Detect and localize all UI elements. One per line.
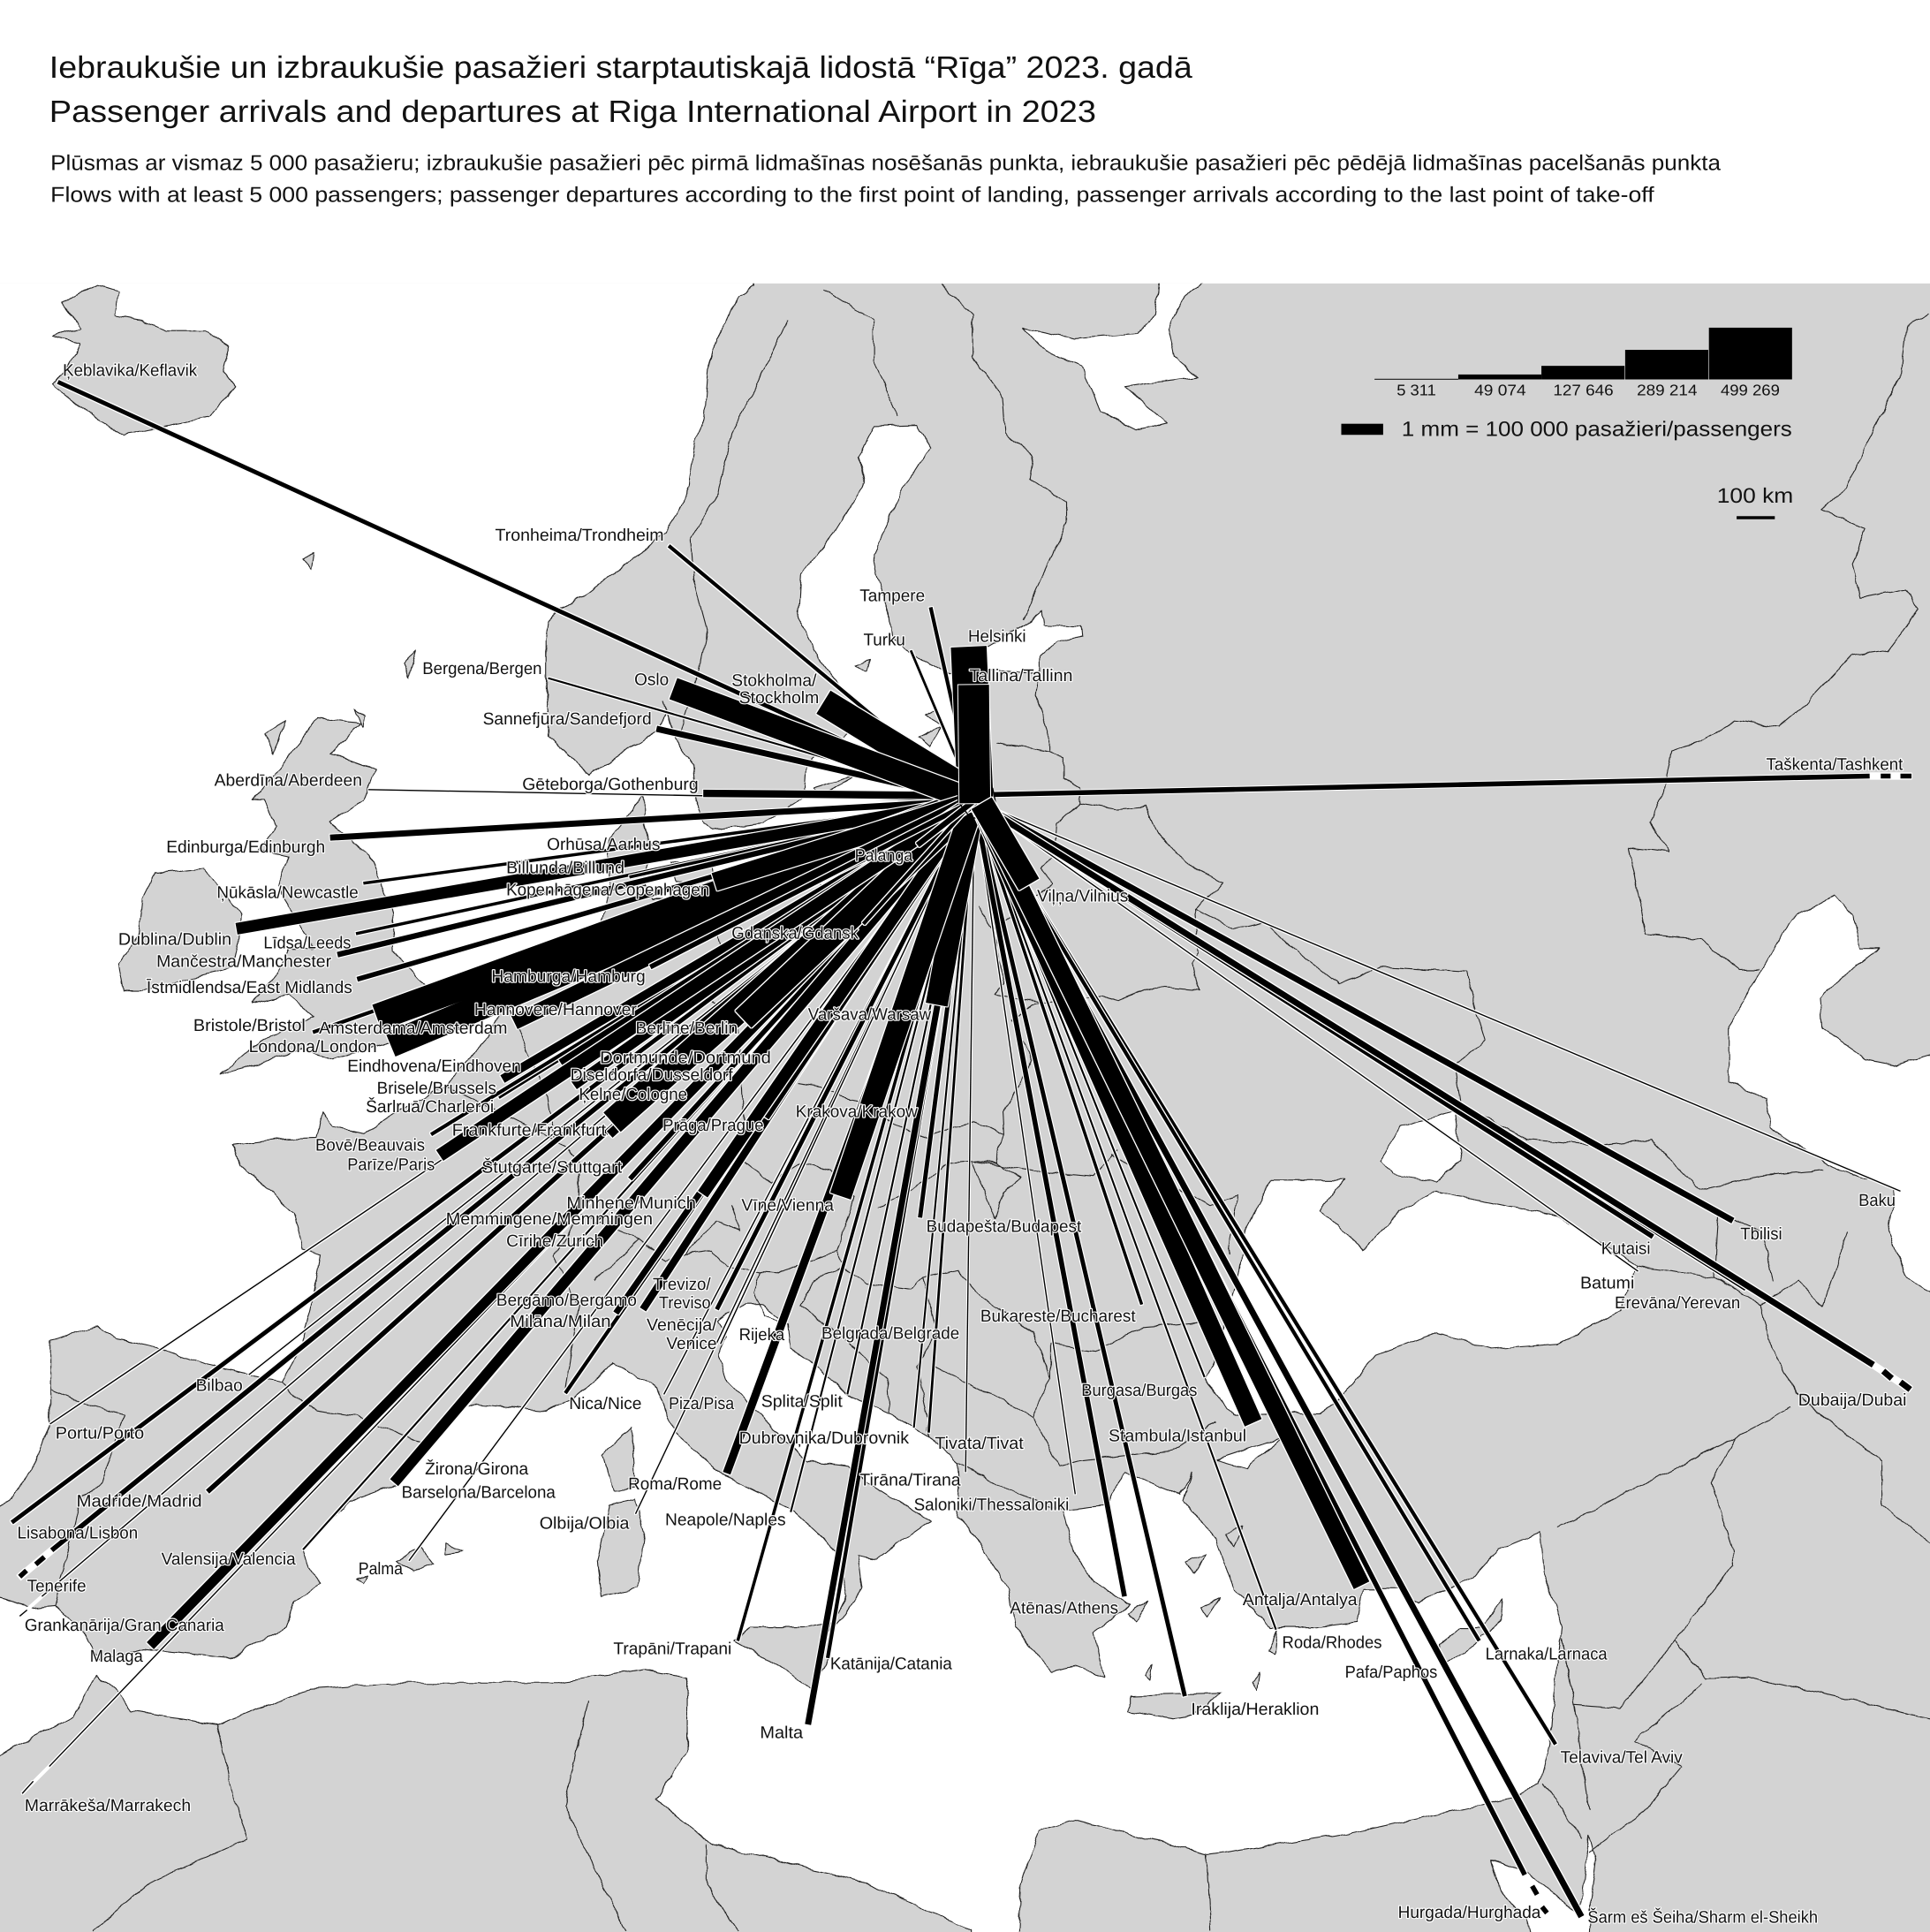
flow: Sandefjord [656,729,974,800]
label: Prague: Prāga/Prague [662,1116,764,1134]
label: Baku: Baku [1858,1191,1896,1209]
flow: Charleroi [431,800,974,1134]
label: Treviso [653,1275,711,1312]
flow: Tashkent [991,776,1911,794]
flow: Palma [409,800,974,1561]
title: Iebraukušie un izbraukušie pasažieri starptautiskajā lidostā “Rīga” 2023. gadā [49,50,1192,85]
flow: Lisbon [11,800,974,1522]
label: Thessaloniki: Saloniki/Thessaloniki [914,1496,1069,1514]
flow: Bergen [549,678,974,800]
label: Gdansk: Gdaņska/Gdansk [731,924,859,943]
flow: Krakow [921,800,974,1102]
flow: Bristol [313,800,974,1033]
flow: Billund [630,800,974,877]
flow: Edinburgh [330,800,974,837]
flow: Rhodes [974,800,1276,1630]
label: Bucharest: Bukareste/Bucharest [980,1307,1136,1325]
label: Paphos: Pafa/Paphos [1345,1663,1437,1681]
label: Tivat: Tivata/Tivat [935,1434,1024,1452]
flow: Bucharest [974,800,1142,1305]
flow: Olbia [636,800,974,1514]
label: Paris: Parīze/Paris [347,1155,435,1174]
scale bar: 100 km [1717,484,1793,508]
flow: Antalya [978,800,1361,1586]
label: Palanga: Palanga [855,846,913,865]
flow: Aberdeen [368,790,974,800]
label: Copenhagen: Kopenhāgena/Copenhagen [506,881,709,899]
flow: Bergamo [643,800,974,1309]
label: Newcastle: Ņūkāsla/Newcastle [216,883,359,902]
label: Beauvais: Bovē/Beauvais [315,1136,425,1155]
label: Memmingen: Memmingene/Memmingen [446,1209,653,1228]
flow: Barcelona [394,800,974,1482]
flow: Brussels [499,800,974,1097]
flow: Hamburg [650,800,974,967]
label: Leeds: Līdsa/Leeds [263,934,352,952]
flow: Sharm el-Sheikh [974,800,1581,1917]
flow: Keflavik [58,382,974,800]
flow: Burgas [974,800,1205,1377]
flow: Turku [911,650,974,800]
flow: Memmingen [611,800,974,1231]
flow: Tel Aviv [974,800,1555,1744]
label: Treviso: Treviso [659,1293,711,1312]
flow: Madrid [208,800,974,1492]
label: Madrid: Madride/Madrid [76,1492,202,1511]
sea of marmara [1215,1437,1283,1468]
legend: flow width histogram: 499 269 [1721,382,1780,399]
label: Marrakech: Marrākeša/Marrakech [25,1796,191,1815]
label: Hurghada: Hurgada/Hurghada [1398,1903,1541,1921]
label: Pisa: Piza/Pisa [669,1394,734,1413]
hub: Riga [958,788,996,818]
label: Hannover: Hannovere/Hannover [474,1000,637,1019]
label: Treviso: Trevizo/ [653,1275,711,1293]
label: Burgas: Burgasa/Burgas [1081,1381,1197,1399]
flow: Marrakech [22,800,974,1793]
label: Budapest: Budapešta/Budapest [927,1217,1081,1236]
label: Trondheim: Tronheima/Trondheim [496,526,664,544]
label: Hamburg: Hamburga/Hamburg [491,967,646,986]
label: Tbilisi: Tbilisi [1740,1224,1782,1243]
flow: Split [847,800,974,1394]
flow: Stuttgart [630,800,974,1178]
label: Aberdeen: Aberdīna/Aberdeen [215,771,362,790]
label: Edinburgh: Edinburga/Edinburgh [166,837,325,856]
label: Bergen: Bergena/Bergen [422,659,542,678]
flow: Kutaisi [974,800,1653,1237]
label: Larnaca: Larnaka/Larnaca [1486,1645,1608,1663]
flow: Tivat [965,800,974,1472]
flow: Larnaca [974,800,1480,1640]
flow: Tampere [931,607,974,800]
flow: Budapest [920,800,974,1217]
flow: Newcastle [363,800,974,883]
flow: Pisa [664,800,974,1394]
flow: Copenhagen [715,800,974,882]
label: Barcelona: Barselona/Barcelona [402,1483,556,1502]
label: Stockholm: Stockholm [739,688,819,707]
flow: Catania [828,800,974,1658]
flow: Dusseldorf [574,800,974,1085]
label: Tashkent: Taškenta/Tashkent [1767,755,1904,774]
white sea [1022,283,1203,431]
label: Bilbao: Bilbao [196,1376,243,1394]
flow: Valencia [303,800,974,1549]
label: Dusseldorf: Diseldorfa/Dusseldorf [571,1065,733,1084]
label: Frankfurt: Frankfurte/Frankfurt [452,1121,606,1140]
label: Rhodes: Roda/Rhodes [1283,1633,1382,1652]
flow: Heraklion [974,800,1184,1696]
label: Sandefjord: Sannefjūra/Sandefjord [483,709,652,728]
flow: Thessaloniki [974,800,1075,1494]
label: Tirana: Tirāna/Tirana [859,1471,961,1489]
flow: Gdansk [863,800,974,924]
legend: flow width histogram [1374,328,1792,399]
label: Krakow: Krakova/Krakow [796,1102,918,1121]
label: Aarhus: Orhūsa/Aarhus [547,835,661,853]
flow: Warsaw [936,800,974,1004]
label: Belgrade: Belgrada/Belgrade [821,1324,960,1343]
label: Split: Splita/Split [761,1392,843,1411]
subtitle: Flows with at least 5 000 passengers; passenger departures according to the first point of landing, passenger arrivals according to the last point of take-off [50,182,1654,207]
label: Olbia: Olbija/Olbia [540,1514,630,1533]
flow: Malaga [150,800,974,1646]
label: Gran Canaria: Grankanārija/Gran Canaria [25,1616,224,1634]
label: Keflavik: Ķeblavika/Keflavik [63,361,197,379]
label: Oslo: Oslo [634,671,670,688]
label: Nice: Nica/Nice [569,1394,642,1413]
label: Eindhoven: Eindhovena/Eindhoven [347,1057,521,1075]
flow: Hannover [514,800,974,1022]
scale bar [1717,484,1793,519]
flow: East Midlands [357,800,974,980]
flow: Paphos [974,800,1442,1661]
label: Milan: Milāna/Milan [510,1312,611,1330]
flow: Frankfurt [609,800,974,1134]
label: Malta: Malta [760,1724,804,1742]
label: Batumi: Batumi [1580,1274,1634,1292]
label: Naples: Neapole/Naples [665,1511,786,1528]
flow: Dubai [974,800,1911,1390]
label: Zurich: Cīrihe/Zurich [506,1231,603,1250]
label: Antalya: Antalja/Antalya [1243,1590,1358,1609]
label: London: Londona/London [249,1037,377,1056]
flow: Gothenburg [703,793,974,796]
flow: Porto [50,800,974,1424]
label: Dublin: Dublina/Dublin [118,930,231,949]
label: Charleroi: Šarlruā/Charleroi [366,1096,494,1116]
label: Amsterdam: Amsterdama/Amsterdam [319,1019,507,1037]
label: Malaga: Malaga [90,1647,143,1665]
flow: Helsinki [969,647,975,800]
subtitle [50,150,1721,207]
label: Tenerife: Tenerife [27,1577,87,1595]
label: Vilnius: Viļņa/Vilnius [1037,887,1128,905]
label: Turku: Turku [863,631,905,649]
flow: Bilbao [249,800,974,1375]
label: Gothenburg: Gēteborga/Gothenburg [522,775,699,793]
label: Warsaw: Varšava/Warsaw [808,1005,931,1024]
label: Brussels: Brisele/Brussels [377,1080,496,1097]
label: Stuttgart: Štutgarte/Stuttgart [481,1156,622,1177]
flow: Cologne [612,800,974,1122]
flow: Prague [764,800,974,1116]
subtitle: Plūsmas ar vismaz 5 000 pasažieru; izbraukušie pasažieri pēc pirmā lidmašīnas nosēšanās punkta, iebraukušie pasažieri pēc pēdējā lidmašīnas pacelšanās punkta [50,150,1721,175]
flow: Zurich [603,800,974,1236]
flow: Naples [791,800,974,1512]
flow: Vienna [841,800,974,1196]
label: Lisbon: Lisabona/Lisbon [18,1524,138,1542]
flow: Treviso [717,800,974,1309]
flow: Yerevan [974,800,1745,1290]
title [49,50,1192,129]
label: Rijeka: Rijeka [739,1325,785,1344]
flow: Leeds [356,800,974,934]
label: Vienna: Vīne/Vienna [741,1196,834,1215]
flow: Batumi [974,800,1639,1271]
label: East Midlands: Īstmidlendsa/East Midlands [147,978,352,996]
legend: flow width histogram: 289 214 [1637,382,1698,399]
flow: Trapani [738,800,974,1640]
flow: Munich [703,800,974,1194]
flow: Istanbul [978,800,1253,1423]
label: Bergamo: Bergāmo/Bergamo [496,1291,637,1309]
flows from Riga [11,382,1911,1917]
label: Heraklion: Iraklija/Heraklion [1191,1700,1319,1718]
legend: flow width histogram: 127 646 [1553,382,1614,399]
label: Rome: Roma/Rome [628,1474,723,1493]
label: Porto: Portu/Porto [56,1424,145,1443]
title: Passenger arrivals and departures at Riga International Airport in 2023 [49,95,1096,129]
flow: Oslo [673,688,974,800]
flow: Athens [974,800,1124,1596]
label: Dubai: Dubaija/Dubai [1798,1390,1907,1409]
legend: flow width histogram: 49 074 [1474,382,1526,399]
flow: Hurghada [974,800,1547,1913]
label: Stockholm [731,671,819,707]
label: Catania: Katānija/Catania [830,1655,952,1673]
label: Tallinn: Tallina/Tallinn [969,666,1073,685]
label: Munich: Minhene/Munich [566,1193,696,1212]
label: Istanbul: Stambula/Istanbul [1109,1427,1246,1445]
flow: Aarhus [662,800,974,843]
label: Billund: Billunda/Billund [506,859,624,877]
flow: Venice [721,800,974,1344]
black sea [1205,1180,1639,1415]
label: Tel Aviv: Telaviva/Tel Aviv [1561,1748,1683,1767]
flow: Dublin [237,800,974,928]
label: Stockholm: Stokholma/ [731,671,817,690]
flow: Dortmund [562,800,974,1064]
flow: Trondheim [669,546,974,800]
flow: Gran Canaria [19,800,974,1616]
label: Bristol: Bristole/Bristol [193,1016,306,1034]
sea of azov [1381,1110,1461,1183]
city labels [18,361,1907,1927]
label: Helsinki: Helsinki [968,627,1026,646]
label: Venice: Venice [666,1334,717,1352]
label: Valencia: Valensija/Valencia [162,1549,296,1568]
label: Dubrovnik: Dubrovņika/Dubrovnik [739,1429,909,1447]
label: Yerevan: Erevāna/Yerevan [1615,1293,1740,1312]
label: Berlin: Berlīne/Berlin [636,1019,738,1037]
caspian sea [1729,896,1930,1312]
flow: Berlin [744,800,974,1019]
label: Girona: Žirona/Girona [425,1458,529,1478]
legend: flow width histogram: 5 311 [1396,382,1436,399]
legend: width key: 1 mm = 100 000 pasažieri/passengers [1402,418,1792,441]
label: Palma: Palma [359,1559,403,1578]
flow: Eindhoven [503,800,974,1080]
flow: Nice [565,800,974,1393]
flow: Dubrovnik [928,800,974,1433]
label: Venice: Venēcija/ [647,1315,717,1334]
flow: Manchester [337,800,974,955]
label: Sharm el-Sheikh: Šarm eš Šeiha/Sharm el-Sheikh [1587,1907,1818,1927]
label: Tampere: Tampere [859,587,926,605]
flow: Vilnius [981,803,1029,884]
label: Venice [647,1315,717,1352]
flow: Girona [418,800,974,1462]
flow: Tallinn [973,685,975,803]
label: Trapani: Trapāni/Trapani [613,1640,731,1658]
flow: Tbilisi [974,800,1733,1221]
islands [53,284,1504,1718]
flow: Rome [727,800,974,1474]
label: Athens: Atēnas/Athens [1010,1599,1118,1618]
flow: Malta [808,800,974,1724]
flow: Palanga [918,800,974,845]
flow: Amsterdam and London [377,800,974,1044]
label: Kutaisi: Kutaisi [1601,1239,1650,1258]
flow: Baku [974,800,1901,1191]
label: Dortmund: Dortmunde/Dortmund [600,1049,771,1067]
flow: Belgrade [914,800,974,1428]
red sea [1492,1836,1596,1932]
flow: Stockholm [823,702,968,791]
flow: Milan [616,800,974,1313]
label: Manchester: Mančestra/Manchester [156,952,332,971]
flow: Tenerife [19,800,974,1578]
label: Cologne: Ķelne/Cologne [579,1085,688,1103]
flow: Paris [440,800,974,1155]
